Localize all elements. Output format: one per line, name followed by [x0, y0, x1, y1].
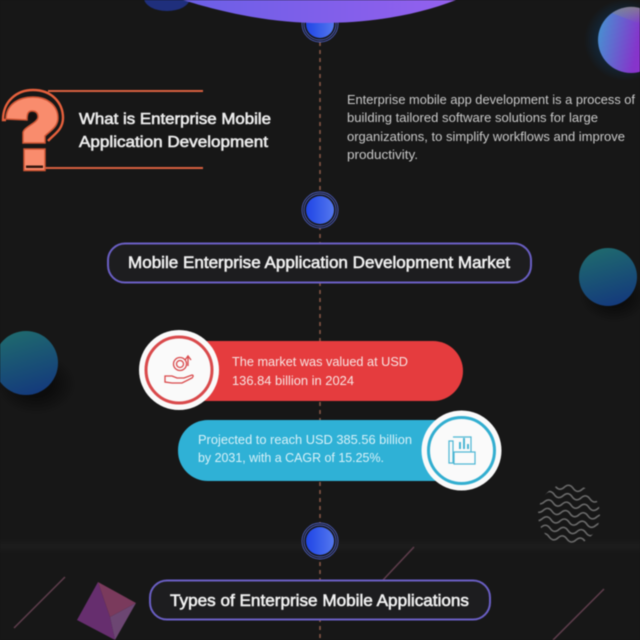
heading: what is enterprise mobile application development: Application Development: [79, 134, 269, 151]
stat card: market value 2024: 136.84 billion in 2024: [232, 374, 354, 388]
decorative diamond: [77, 582, 136, 640]
icon: question mark: [3, 90, 63, 170]
icon: document charts: [449, 437, 475, 464]
stat card: projection 2031: by 2031, with a CAGR of 15.25%.: [198, 451, 384, 465]
decorative line: left: [14, 577, 65, 628]
stat card: projection 2031: [178, 410, 502, 490]
node: types section: [302, 523, 338, 559]
decorative sphere: left teal: [0, 331, 76, 414]
stat card: market value 2024: The market was valued at USD: [232, 355, 408, 369]
node: market section: [302, 192, 338, 228]
decorative pattern: wave circle: [538, 484, 600, 544]
text block: definition: organizations, to simplify workflows and improve: [347, 130, 625, 144]
timeline: dashed connector: [319, 42, 321, 640]
heading: what is enterprise mobile application development: [79, 111, 271, 151]
stat card: projection 2031: Projected to reach USD 385.56 billion: [198, 433, 412, 447]
heading: what is enterprise mobile application development: What is Enterprise Mobile: [79, 111, 271, 128]
question heading rule: top: [48, 90, 203, 92]
heading pill: market: Mobile Enterprise Application Development Market: [128, 253, 510, 272]
text block: definition: productivity.: [347, 148, 418, 162]
text block: definition: [347, 93, 636, 162]
top blob: small blue shape: [144, 0, 190, 11]
decorative line: far right: [553, 589, 604, 640]
icon: hand with coin: [165, 356, 193, 383]
decorative sphere: top right: [584, 0, 640, 81]
question heading rule: bottom: [45, 167, 203, 169]
stat card: market value 2024: [139, 330, 463, 410]
decorative line: centre right: [383, 547, 414, 580]
top blob: purple ellipse: [183, 0, 456, 23]
faint horizontal band: [0, 538, 640, 554]
heading pill: market: [108, 244, 531, 282]
heading pill: types: Types of Enterprise Mobile Applications: [170, 591, 469, 610]
node: top timeline: [302, 6, 338, 42]
decorative sphere: right teal: [579, 248, 640, 322]
text block: definition: building tailored software solutions for large: [347, 111, 598, 125]
heading pill: types: [150, 580, 490, 620]
text block: definition: Enterprise mobile app development is a process of: [347, 93, 636, 107]
